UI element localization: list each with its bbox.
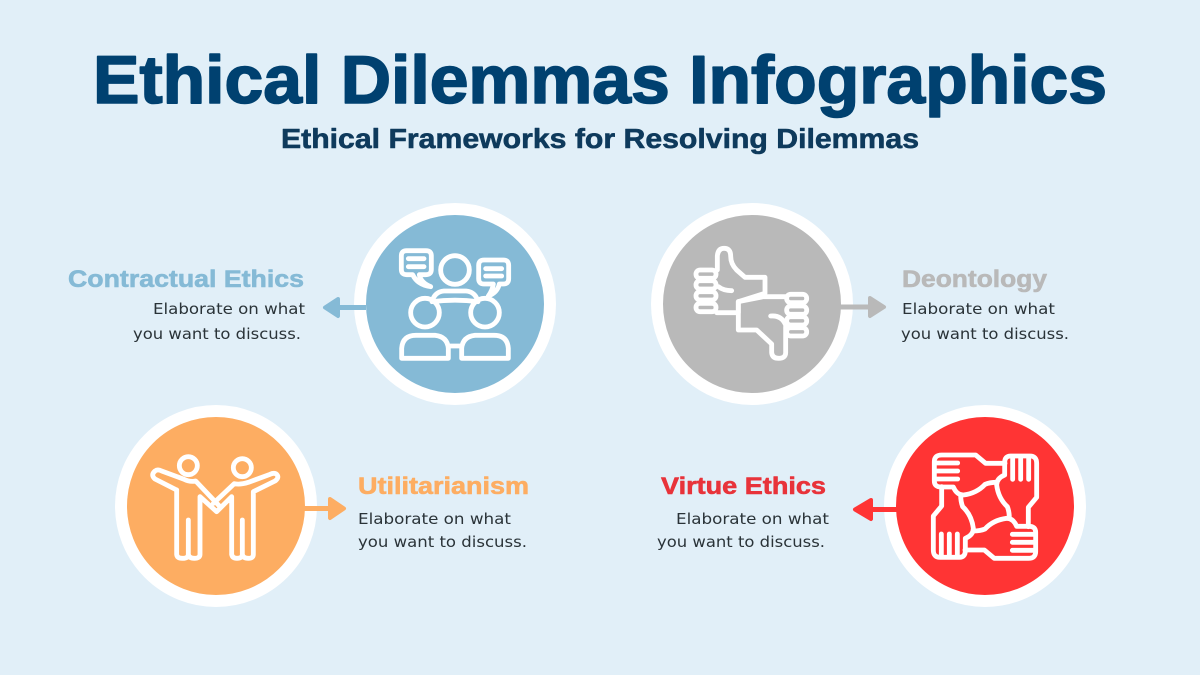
text: contractual ethics description: you want to discuss. <box>133 325 301 343</box>
circle: blue <box>360 209 550 399</box>
icon: two people holding hands <box>153 457 278 558</box>
text: contractual ethics description: Elaborate on what <box>153 300 305 318</box>
text: deontology description: you want to discuss. <box>901 325 1069 343</box>
subtitle: Ethical Frameworks for Resolving Dilemmas <box>281 123 919 154</box>
heading: utilitarianism: Utilitarianism <box>358 473 529 500</box>
circle: orange <box>121 411 311 601</box>
text: deontology description <box>901 300 1069 343</box>
icon: four interlocked hands <box>933 455 1037 558</box>
panel: contractual ethics <box>68 209 550 399</box>
arrow: left blue <box>325 299 366 316</box>
arrow: right gray <box>840 298 884 316</box>
heading: deontology: Deontology <box>902 266 1048 293</box>
text: virtue ethics description <box>657 510 829 551</box>
icon: thumbs up and down <box>696 248 807 358</box>
panel: deontology <box>657 209 1069 399</box>
text: virtue ethics description: Elaborate on what <box>676 510 829 528</box>
text: utilitarianism description: you want to discuss. <box>358 533 527 551</box>
circle: gray <box>657 209 847 399</box>
arrow: left red <box>855 500 898 519</box>
heading: virtue ethics: Virtue Ethics <box>661 473 826 500</box>
text: deontology description: Elaborate on what <box>902 300 1055 318</box>
circle: red <box>890 411 1080 601</box>
heading: contractual ethics: Contractual Ethics <box>68 266 304 293</box>
title: Ethical Dilemmas Infographics <box>93 42 1107 118</box>
text: contractual ethics description <box>133 300 305 343</box>
icon: people in discussion <box>401 251 509 358</box>
panel: virtue ethics <box>657 411 1080 601</box>
text: utilitarianism description <box>358 510 527 551</box>
text: virtue ethics description: you want to discuss. <box>657 533 825 551</box>
panel: utilitarianism <box>121 411 529 601</box>
arrow: right orange <box>304 499 344 518</box>
text: utilitarianism description: Elaborate on what <box>358 510 511 528</box>
